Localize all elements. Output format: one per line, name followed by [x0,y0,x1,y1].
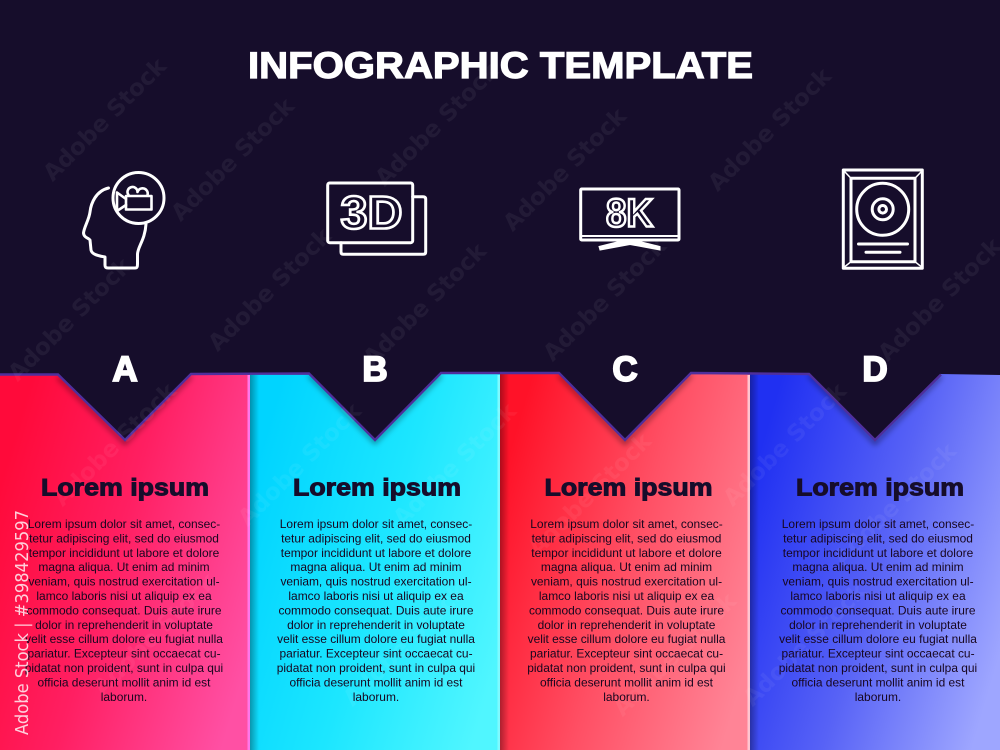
text block B: veniam, quis nostrud exercitation ul- [280,575,472,589]
text block D: dolor in reprehenderit in voluptate [789,618,967,632]
text block D: magna aliqua. Ut enim ad minim [792,560,964,574]
text block D: laborum. [855,690,901,704]
text block A: pidatat non proident, sunt in culpa qui [25,661,223,675]
icon: 8K television: 8K [606,192,653,236]
text block C: veniam, quis nostrud exercitation ul- [531,575,722,589]
text block C: commodo consequat. Duis aute irure [529,603,724,617]
letter A: A [112,350,138,389]
vertical stock credit: Adobe Stock | #398429597 [13,510,33,735]
text block C: tetur adipiscing elit, sed do eiusmod [532,531,721,545]
text block B: dolor in reprehenderit in voluptate [287,618,465,632]
text block B: commodo consequat. Duis aute irure [278,603,474,617]
watermarks: Adobe Stock [48,378,182,512]
watermarks: Adobe Stock [233,398,367,532]
watermarks: Adobe Stock [166,93,300,227]
watermarks: Adobe Stock [523,428,657,562]
text block C: dolor in reprehenderit in voluptate [538,618,716,632]
text block B: pidatat non proident, sunt in culpa qui [277,661,475,675]
icon: 3D screens: 3D [340,186,402,238]
text block A: velit esse cillum dolore eu fugiat nulla [25,632,223,646]
watermarks: Adobe Stock [3,253,137,387]
watermarks: Adobe Stock [358,238,492,372]
text block B: lamco laboris nisi ut aliquip ex ea [288,589,464,603]
text block A: laborum. [101,690,147,704]
text block A: commodo consequat. Duis aute irure [26,603,222,617]
text block D: officia deserunt mollit anim id est [792,675,965,689]
watermarks: Adobe Stock [718,378,852,512]
text block B: velit esse cillum dolore eu fugiat nulla [277,632,475,646]
text block C: pariatur. Excepteur sint occaecat cu- [530,647,723,661]
watermarks: Adobe Stock [703,63,837,197]
text block A: tetur adipiscing elit, sed do eiusmod [29,531,219,545]
text block B: tetur adipiscing elit, sed do eiusmod [281,531,471,545]
text block C: officia deserunt mollit anim id est [540,675,714,689]
letter D: D [862,350,888,389]
panel: D background [750,370,1000,750]
text block A: veniam, quis nostrud exercitation ul- [28,575,220,589]
text block A: Lorem ipsum dolor sit amet, consec- [28,517,220,531]
dark top band with notches [0,0,1000,440]
text block C: tempor incididunt ut labore et dolore [531,546,722,560]
text block B: Lorem ipsum dolor sit amet, consec- [280,517,472,531]
watermarks: Adobe Stock [388,398,522,532]
panel: A background [0,370,250,750]
watermarks: Adobe Stock [828,438,962,572]
watermarks: Adobe Stock [608,588,742,722]
text block D: tetur adipiscing elit, sed do eiusmod [783,531,973,545]
watermarks: Adobe Stock [498,103,632,237]
heading D: Lorem ipsum [796,475,964,502]
text block D: tempor incididunt ut labore et dolore [783,546,974,560]
text block A: tempor incididunt ut labore et dolore [29,546,220,560]
text block C: velit esse cillum dolore eu fugiat nulla [528,632,726,646]
icon: framed disc [843,170,922,268]
heading A: Lorem ipsum [41,475,209,502]
text block B: laborum. [353,690,399,704]
text block B: magna aliqua. Ut enim ad minim [290,560,462,574]
watermarks: Adobe Stock [88,568,222,702]
text block A: lamco laboris nisi ut aliquip ex ea [36,589,212,603]
text block A: dolor in reprehenderit in voluptate [35,618,213,632]
heading C: Lorem ipsum [544,475,712,502]
icon: 8K television [581,189,679,250]
text block C: laborum. [603,690,650,704]
text block D: veniam, quis nostrud exercitation ul- [782,575,974,589]
text block C: magna aliqua. Ut enim ad minim [541,560,712,574]
text block A: officia deserunt mollit anim id est [38,675,211,689]
text block A: pariatur. Excepteur sint occaecat cu- [27,647,221,661]
letter C: C [612,350,638,389]
panel: B background [250,370,500,750]
text block D: pidatat non proident, sunt in culpa qui [779,661,977,675]
watermarks: Adobe Stock [538,233,672,367]
title: INFOGRAPHIC TEMPLATE [248,45,753,86]
text block D: pariatur. Excepteur sint occaecat cu- [781,647,975,661]
watermarks: Adobe Stock [738,578,872,712]
icon: 3D screens [328,183,426,254]
watermarks: Adobe Stock [38,53,172,187]
text block D: lamco laboris nisi ut aliquip ex ea [790,589,966,603]
watermarks: Adobe Stock [203,223,337,357]
text block A: magna aliqua. Ut enim ad minim [38,560,210,574]
text block D: commodo consequat. Duis aute irure [780,603,976,617]
letter B: B [362,350,388,389]
text block C: pidatat non proident, sunt in culpa qui [527,661,726,675]
text block C: Lorem ipsum dolor sit amet, consec- [530,517,723,531]
text block C: lamco laboris nisi ut aliquip ex ea [539,589,714,603]
text block B: pariatur. Excepteur sint occaecat cu- [279,647,473,661]
text block D: Lorem ipsum dolor sit amet, consec- [782,517,974,531]
panel: C background [500,370,750,750]
text block B: tempor incididunt ut labore et dolore [281,546,472,560]
heading B: Lorem ipsum [293,475,461,502]
watermarks: Adobe Stock [338,578,472,712]
text block B: officia deserunt mollit anim id est [290,675,463,689]
watermarks: Adobe Stock [370,58,504,192]
text block D: velit esse cillum dolore eu fugiat nulla [779,632,977,646]
icon: head with movie camera [84,172,164,268]
